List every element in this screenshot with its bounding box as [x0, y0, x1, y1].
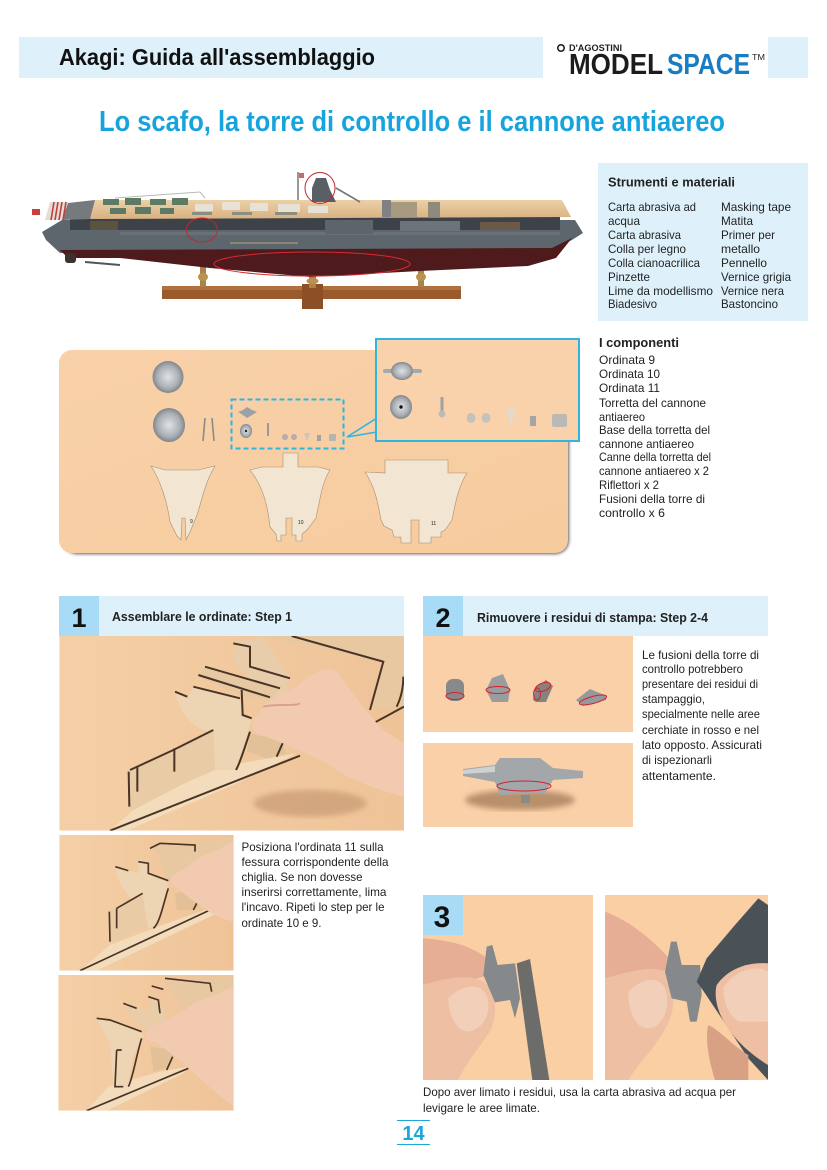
components text: Ordinata 9 — [599, 354, 655, 367]
step 2 text: Le fusioni della torre di — [642, 649, 759, 662]
callout leader — [347, 418, 377, 437]
step 3 photo 1 — [423, 895, 593, 1080]
components text: Canne della torretta del — [599, 451, 711, 464]
components text: Ordinata 11 — [599, 382, 660, 395]
step 2 text: stampaggio, — [642, 693, 705, 706]
step 1 photo 2 — [59, 835, 234, 971]
step 3 text — [423, 1086, 736, 1115]
control tower — [297, 172, 360, 202]
red mark — [497, 781, 551, 791]
panel heading: Strumenti e materiali — [608, 176, 735, 190]
page title: Lo scafo, la torre di controllo e il cannone antiaereo — [99, 106, 725, 138]
list: first column — [608, 201, 713, 311]
step 2 header: Rimuovere i residui di stampa: Step 2-4 — [477, 610, 709, 625]
ship stand — [162, 266, 461, 309]
step 2 text: presentare dei residui di — [642, 678, 758, 691]
step 2 text — [642, 649, 762, 783]
panel: tools and materials — [598, 163, 808, 321]
step 1 text: inserirsi correttamente, lima — [242, 886, 387, 899]
components text: Riflettori x 2 — [599, 479, 659, 492]
step 2 photo 2 — [423, 743, 633, 827]
list: second column: Masking tape — [721, 201, 791, 214]
step 2 text: specialmente nelle aree — [642, 708, 760, 721]
components heading: I componenti — [599, 336, 679, 350]
panel: components list — [599, 336, 711, 520]
list: second column — [721, 201, 792, 311]
step 2 header — [423, 596, 768, 636]
frame 9 — [151, 466, 215, 540]
step 2 photo 1 — [423, 636, 633, 732]
list: first column: Pinzette — [608, 271, 650, 284]
red circle: gun mount — [186, 218, 218, 242]
step 3 text: Dopo aver limato i residui, usa la carta abrasiva ad acqua per — [423, 1086, 736, 1099]
step 2 text: lato opposto. Assicurati — [642, 739, 762, 752]
small parts group — [238, 407, 336, 441]
step 3 photo 2 — [605, 895, 768, 1080]
logo area: SPACE — [667, 49, 750, 81]
logo area: D'AGOSTINI — [569, 43, 622, 53]
dashed selection box — [232, 400, 344, 448]
part: disc 1 — [152, 361, 184, 393]
page number — [397, 1120, 430, 1145]
logo area: TM — [752, 53, 765, 62]
deck railing — [115, 192, 205, 198]
components text: Fusioni della torre di — [599, 493, 705, 506]
components text: Ordinata 10 — [599, 368, 660, 381]
step 3 number: 3 — [434, 901, 450, 934]
list: first column: acqua — [608, 215, 641, 228]
components text: antiaereo — [599, 411, 645, 424]
callout: enlarged small parts — [376, 339, 579, 441]
components text: Base della torretta del — [599, 424, 710, 437]
logo area: MODEL — [569, 49, 663, 81]
part: gun barrels — [203, 418, 214, 441]
step 2 header: 2 — [435, 603, 451, 633]
step 3 number — [423, 895, 463, 935]
frame 10: 10 — [298, 520, 304, 526]
step 2 text: cerchiate in rosso e nel — [642, 724, 759, 737]
part: disc 2 — [153, 408, 185, 442]
aircraft on deck — [103, 198, 328, 215]
frame 10 — [250, 453, 330, 541]
step 1 text: l'incavo. Ripeti lo step per le — [242, 901, 384, 914]
red circle: hull — [214, 252, 410, 276]
step 1 text: chiglia. Se non dovesse — [242, 871, 362, 884]
components text: Torretta del cannone — [599, 397, 706, 410]
step 1 text: ordinate 10 e 9. — [242, 917, 322, 930]
step 3 text: levigare le aree limate. — [423, 1102, 540, 1115]
red marks — [446, 681, 607, 707]
step 1 main photo — [59, 636, 404, 831]
ship hull — [42, 220, 583, 253]
panel: components photo — [59, 339, 579, 554]
red circle: tower — [305, 172, 335, 204]
step 2 text: controllo potrebbero — [642, 663, 743, 676]
list: second column: metallo — [721, 243, 760, 256]
step 2 text: attentamente. — [642, 770, 716, 783]
stern deck and flag stripes — [32, 200, 95, 220]
flight deck — [90, 200, 571, 219]
page number: 14 — [402, 1123, 425, 1145]
list: second column: Pennello — [721, 257, 767, 270]
step 2 text: di ispezionarli — [642, 754, 712, 767]
list: second column: Bastoncino — [721, 298, 778, 311]
photo: ship model on stand — [32, 172, 583, 309]
header bar — [19, 37, 808, 81]
list: second column: Matita — [721, 215, 754, 228]
list: second column: Vernice grigia — [721, 271, 792, 284]
list: first column: Colla per legno — [608, 243, 686, 256]
step 1 text: fessura corrispondente della — [242, 856, 389, 869]
list: first column: Biadesivo — [608, 298, 657, 311]
step 1 photo 3 — [58, 975, 234, 1111]
header title: Akagi: Guida all'assemblaggio — [59, 44, 375, 70]
logo area — [543, 37, 768, 81]
step 1 header: 1 — [71, 603, 87, 633]
list: first column: Carta abrasiva ad — [608, 201, 696, 214]
frame 11 — [365, 460, 467, 543]
step 1 text: Posiziona l'ordinata 11 sulla — [242, 841, 384, 854]
list: second column: Vernice nera — [721, 285, 785, 298]
list: second column: Primer per — [721, 229, 775, 242]
list: first column: Carta abrasiva — [608, 229, 682, 242]
step 1 header — [59, 596, 404, 636]
step 1 text — [242, 841, 389, 930]
components text: cannone antiaereo x 2 — [599, 465, 709, 478]
components text: controllo x 6 — [599, 507, 665, 520]
hangar gallery — [70, 217, 560, 234]
list: first column: Colla cianoacrilica — [608, 257, 701, 270]
list: first column: Lime da modellismo — [608, 285, 713, 298]
frame 9: 9 — [190, 519, 193, 525]
step 1 header: Assemblare le ordinate: Step 1 — [112, 609, 292, 624]
components text — [599, 354, 711, 520]
components text: cannone antiaereo — [599, 438, 694, 451]
frame 11: 11 — [431, 521, 436, 527]
